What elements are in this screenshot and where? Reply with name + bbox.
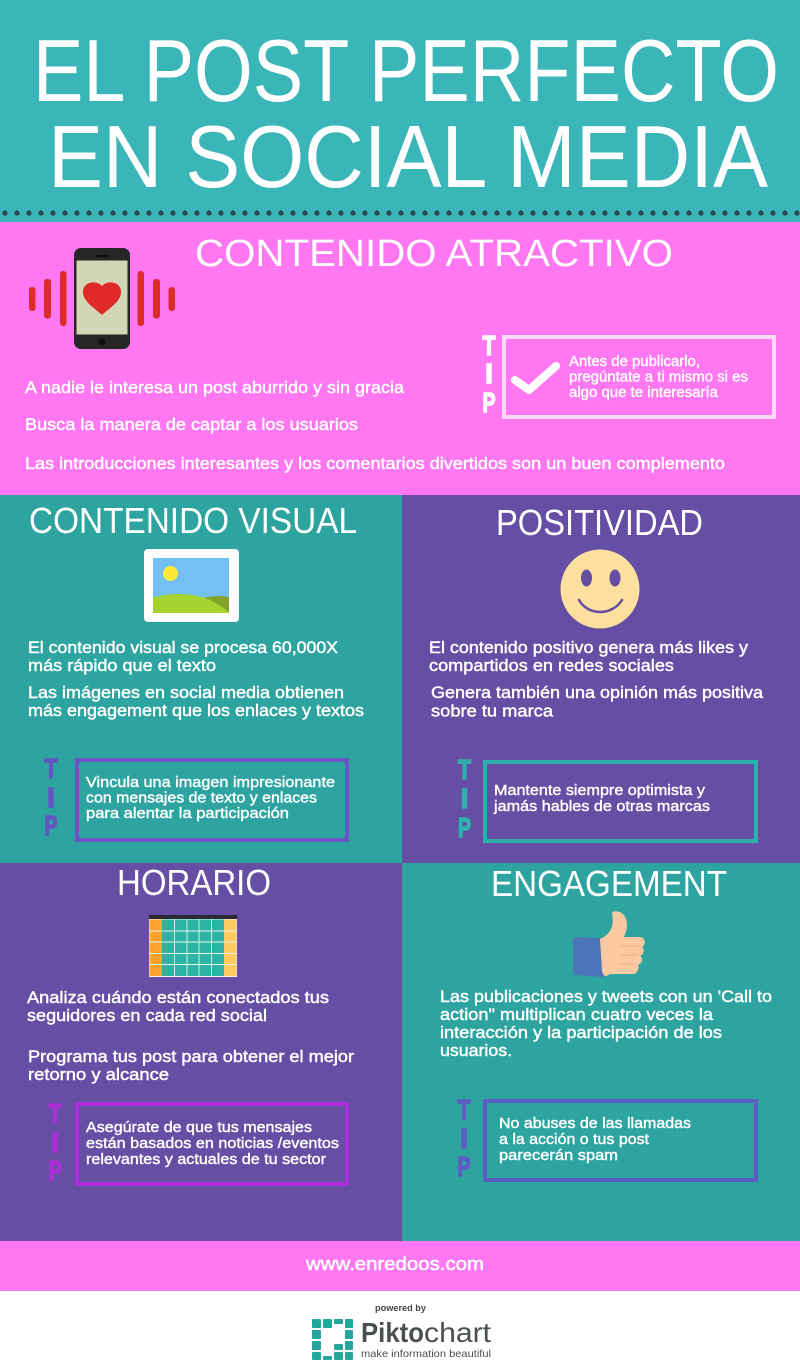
tip: contenido atractivo: [482, 330, 774, 418]
title: [33, 21, 779, 206]
footer: piktochart branding: [0, 1291, 800, 1371]
tip: horario: relevantes y actuales de tu sector: [86, 1151, 326, 1168]
icon: piktochart logo: [312, 1319, 353, 1360]
body text: engagement: action" multiplican cuatro veces la: [440, 1005, 714, 1024]
body text: horario: Analiza cuándo están conectados tus: [27, 988, 329, 1007]
heading: contenido visual: CONTENIDO VISUAL: [29, 500, 357, 541]
heading: contenido atractivo: CONTENIDO ATRACTIVO: [195, 233, 673, 275]
footer band: website: www.enredoos.com: [305, 1254, 484, 1274]
tip: positividad: jamás hables de otras marcas: [493, 798, 710, 815]
body text: contenido atractivo: Busca la manera de captar a los usuarios: [25, 415, 358, 434]
tip: engagement: No abuses de las llamadas: [499, 1115, 691, 1132]
body text: horario: Programa tus post para obtener el mejor: [28, 1047, 354, 1066]
tip: contenido visual: P: [44, 810, 58, 841]
body text: horario: seguidores en cada red social: [27, 1006, 267, 1025]
body text: contenido visual: más rápido que el texto: [28, 656, 216, 675]
tip: horario: T: [48, 1098, 62, 1129]
panel: contenido visual: [0, 495, 402, 863]
panel: engagement: [402, 863, 800, 1241]
body text: contenido atractivo: [25, 378, 725, 473]
tip: positividad: I: [461, 783, 468, 814]
tip: contenido atractivo: T: [482, 330, 496, 361]
body text: horario: retorno y alcance: [28, 1065, 169, 1084]
icon: picture: [144, 549, 239, 622]
tip: positividad: Mantente siempre optimista y: [494, 782, 706, 799]
body text: positividad: Genera también una opinión más positiva: [431, 683, 764, 702]
title: EN SOCIAL MEDIA: [48, 107, 768, 206]
tip: contenido visual: Vincula una imagen impresionante: [86, 774, 335, 791]
wordmark: Pikto: [361, 1317, 424, 1348]
footer band: website: [0, 1241, 800, 1291]
tip: contenido atractivo: I: [485, 358, 493, 389]
tip: engagement: [458, 1094, 756, 1182]
body text: contenido visual: El contenido visual se procesa 60,000X: [28, 638, 338, 657]
tip: contenido atractivo: pregúntate a ti mismo si es: [569, 368, 748, 386]
body text: engagement: Las publicaciones y tweets con un 'Call to: [440, 987, 772, 1006]
tip: contenido visual: [44, 753, 347, 841]
heading: positividad: POSITIVIDAD: [496, 502, 703, 543]
icon: phone with heart: [29, 248, 175, 349]
tip: engagement: a la acción o tus post: [499, 1131, 650, 1148]
wordmark: [361, 1317, 491, 1360]
tip: positividad: T: [458, 754, 471, 785]
heading: engagement: ENGAGEMENT: [491, 863, 727, 904]
tip: contenido visual: T: [44, 753, 58, 784]
tip: horario: P: [48, 1155, 62, 1186]
panel: contenido atractivo: [0, 222, 800, 495]
body text: contenido visual: [28, 638, 364, 720]
heading: horario: HORARIO: [117, 862, 271, 903]
tip: positividad: [458, 754, 756, 843]
body text: positividad: El contenido positivo genera más likes y: [429, 638, 749, 657]
panel: positividad: [402, 495, 800, 863]
body text: horario: [27, 988, 354, 1084]
icon: calendar: [149, 915, 237, 977]
header band: [0, 0, 800, 222]
panel: horario: [0, 862, 402, 1241]
body text: contenido visual: Las imágenes en social media obtienen: [28, 683, 344, 702]
body text: contenido atractivo: A nadie le interesa un post aburrido y sin gracia: [25, 378, 405, 397]
icon: smiley: [560, 550, 640, 628]
wordmark: chart: [424, 1317, 491, 1348]
tip: engagement: parecerán spam: [499, 1147, 618, 1164]
body text: positividad: [429, 638, 764, 720]
tip: horario: I: [51, 1127, 59, 1158]
body text: positividad: compartidos en redes sociales: [429, 656, 674, 675]
tip: engagement: P: [458, 1151, 470, 1182]
body text: contenido atractivo: Las introducciones interesantes y los comentarios divertidos son un buen complemento: [25, 454, 725, 473]
tip: contenido visual: I: [47, 782, 55, 813]
tip: horario: están basados en noticias /eventos: [86, 1135, 339, 1152]
body text: contenido visual: más engagement que los enlaces y textos: [28, 701, 364, 720]
icon: check mark: [515, 366, 556, 390]
wordmark: make information beautiful: [361, 1348, 491, 1360]
icon: thumbs up: [573, 911, 645, 977]
tip: horario: [48, 1098, 347, 1186]
tip: engagement: T: [458, 1094, 470, 1125]
tip: contenido atractivo: algo que te interesaría: [569, 384, 719, 401]
tip: contenido atractivo: Antes de publicarlo,: [569, 353, 700, 370]
tip: positividad: P: [458, 812, 471, 843]
body text: engagement: interacción y la participación de los: [440, 1023, 722, 1042]
body text: engagement: [440, 987, 772, 1060]
body text: engagement: usuarios.: [440, 1041, 512, 1060]
tip: engagement: I: [460, 1123, 468, 1154]
body text: positividad: sobre tu marca: [431, 702, 554, 720]
tip: contenido visual: con mensajes de texto y enlaces: [86, 790, 317, 806]
tip: horario: Asegúrate de que tus mensajes: [86, 1119, 312, 1136]
footer: piktochart branding: powered by: [375, 1303, 427, 1314]
tip: contenido visual: para alentar la participación: [86, 805, 289, 822]
tip: contenido atractivo: P: [482, 387, 496, 418]
